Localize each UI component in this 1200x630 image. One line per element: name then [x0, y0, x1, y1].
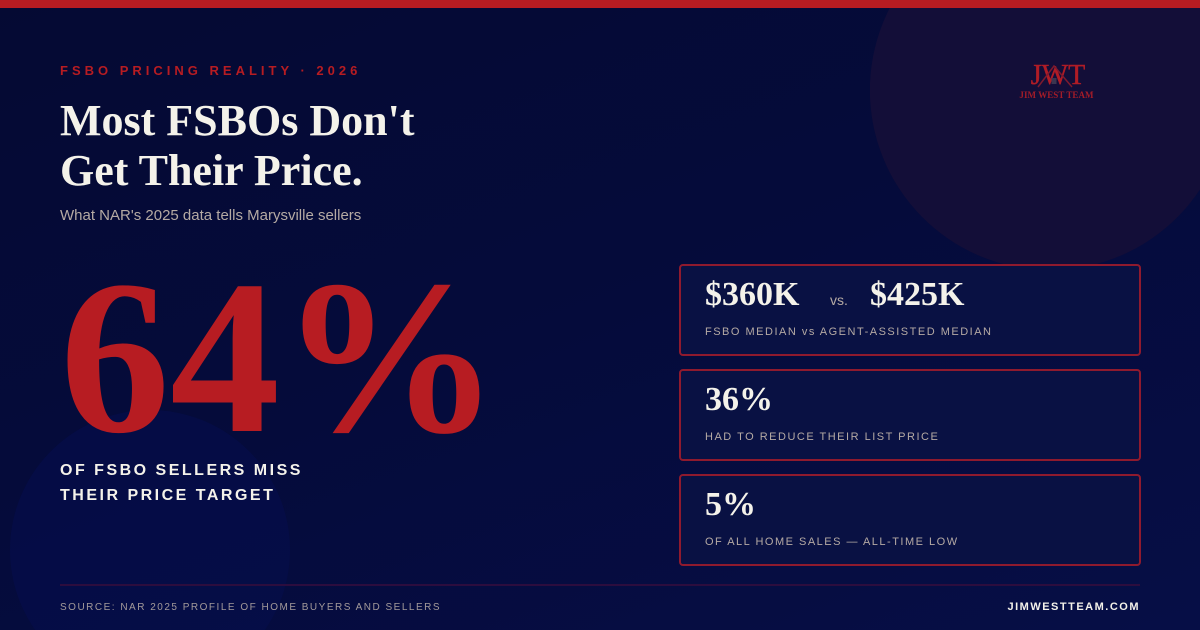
- title: Get Their Price.: [60, 146, 363, 195]
- caption: HAD TO REDUCE THEIR LIST PRICE: [705, 431, 939, 443]
- website: JIMWESTTEAM.COM: [1008, 601, 1140, 613]
- title: [60, 96, 414, 195]
- card: price comparison: [679, 264, 1141, 356]
- big statistic label: [60, 462, 303, 504]
- eyebrow label: FSBO PRICING REALITY · 2026: [60, 63, 361, 78]
- big statistic label: THEIR PRICE TARGET: [60, 487, 275, 504]
- subtitle: What NAR's 2025 data tells Marysville sellers: [60, 207, 361, 224]
- card: share of sales: [679, 474, 1141, 566]
- decorative circle: top right: [870, 8, 1200, 264]
- big statistic label: OF FSBO SELLERS MISS: [60, 462, 303, 479]
- caption: OF ALL HOME SALES — ALL-TIME LOW: [705, 536, 959, 548]
- value: 36%: [705, 381, 773, 418]
- top accent bar: [0, 0, 1200, 8]
- title: Most FSBOs Don't: [60, 96, 414, 145]
- value: 5%: [705, 486, 756, 523]
- footer divider: [60, 584, 1140, 586]
- caption: FSBO MEDIAN vs AGENT-ASSISTED MEDIAN: [705, 326, 992, 338]
- vs label: vs.: [830, 292, 848, 308]
- big statistic: 64%: 64%: [60, 235, 500, 479]
- logo: Jim West Team: JWT: [1031, 60, 1085, 91]
- source note: SOURCE: NAR 2025 PROFILE OF HOME BUYERS AND SELLERS: [60, 602, 441, 613]
- decorative circle: bottom left: [10, 410, 290, 630]
- logo: Jim West Team: [1019, 60, 1094, 100]
- logo: Jim West Team: JIM WEST TEAM: [1019, 90, 1094, 100]
- card: price reductions: [679, 369, 1141, 461]
- FSBO median value: $360K: [705, 276, 799, 313]
- agent-assisted median value: $425K: [870, 276, 964, 313]
